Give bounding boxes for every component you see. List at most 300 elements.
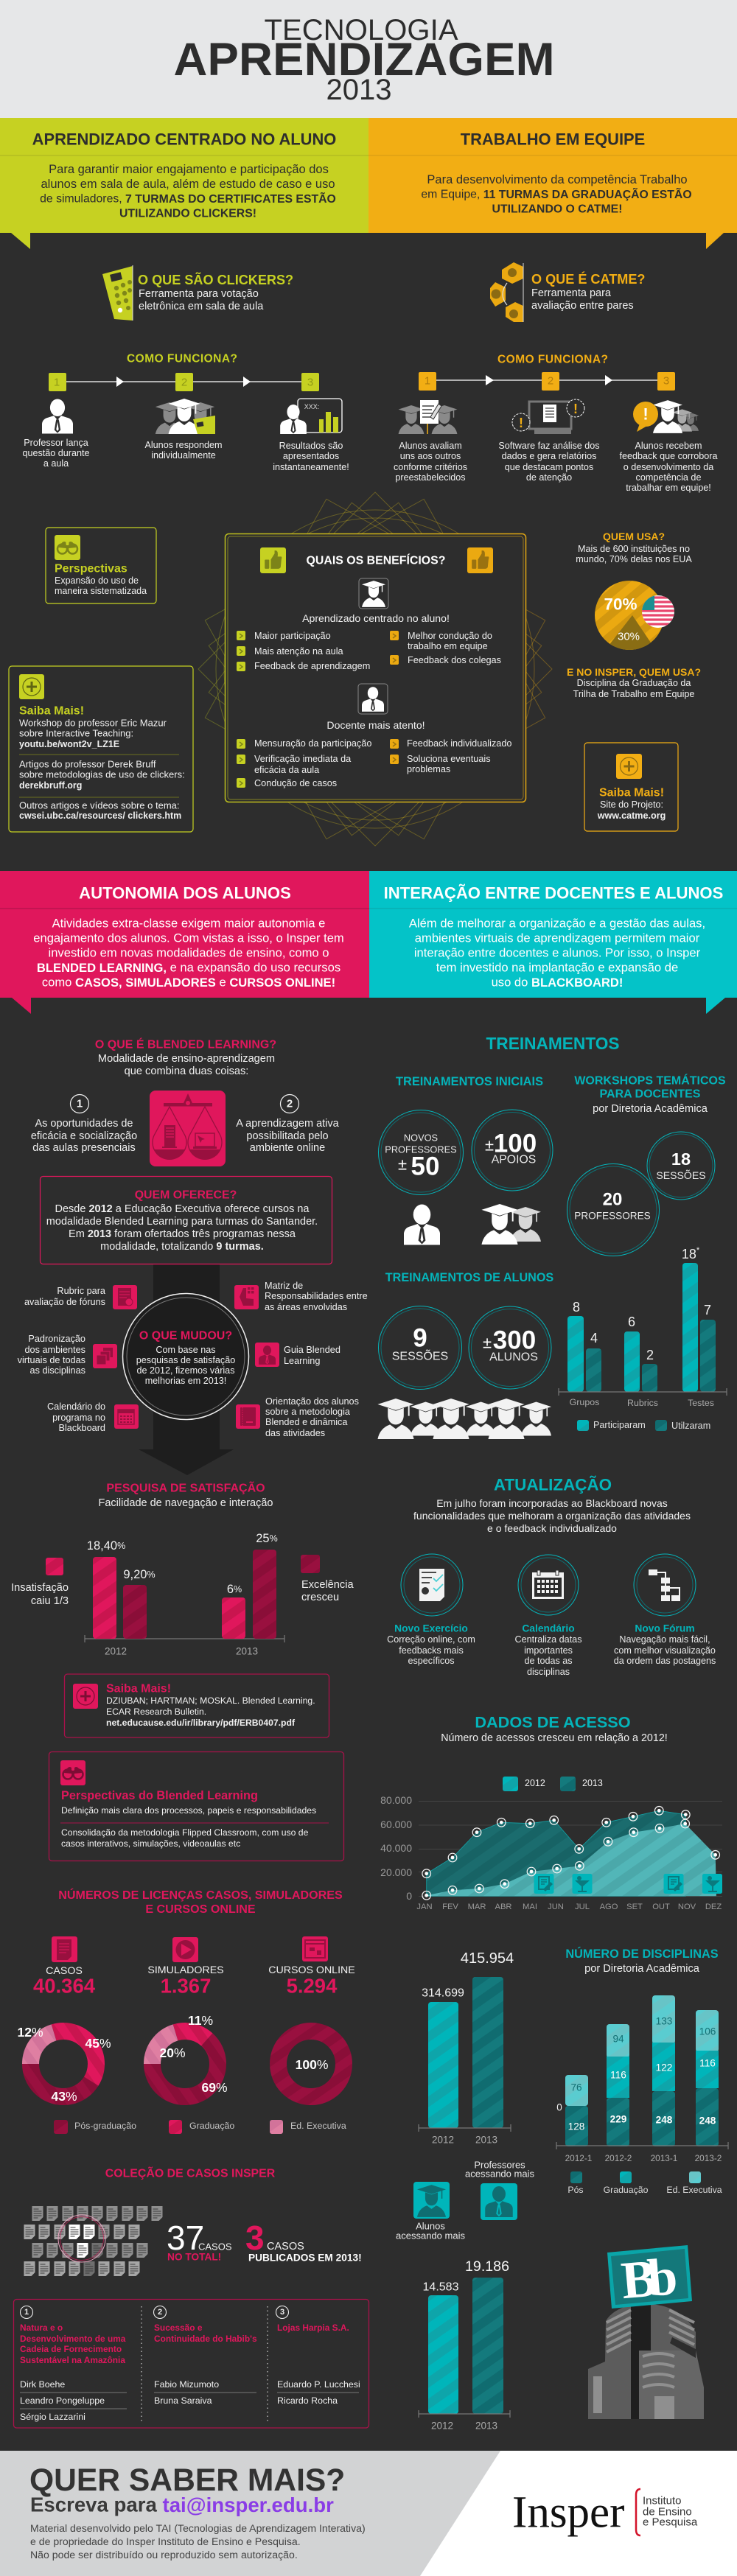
heading: treinamentos iniciais: TREINAMENTOS INICIAIS [396, 1075, 543, 1088]
area chart: acessos: MAI [523, 1903, 537, 1911]
circle: 300 alunos [469, 1306, 551, 1389]
legend [503, 1777, 603, 1791]
stacked bar chart: disciplinas: 116 [699, 2057, 716, 2069]
area chart: acessos: AGO [600, 1903, 618, 1911]
step labels: de atenção [526, 472, 572, 483]
icon: alunos acessando mais: acessando mais [396, 2230, 465, 2241]
step labels: apresentados [283, 451, 339, 461]
stat: 3 casos publicados [245, 2219, 362, 2264]
icon: plus orange [616, 754, 642, 779]
item: aulas presenciais [31, 1095, 137, 1154]
heading: atualizacao: e o feedback individualizado [487, 1522, 617, 1534]
step labels: dados e gera relatórios [502, 451, 596, 461]
text: o que e blended learning [95, 1037, 276, 1077]
step labels: instantaneamente! [273, 462, 349, 472]
icon: plus pink [73, 1684, 98, 1709]
circle: novos professores: NOVOS [404, 1132, 438, 1144]
text: o que é catme [531, 271, 645, 312]
case 1: Desenvolvimento de uma [20, 2334, 126, 2344]
item: padronizacao [18, 1334, 117, 1376]
feature: novo exercicio: Novo Exercício [394, 1623, 468, 1634]
panel: perspectivas clickers [46, 528, 156, 603]
bar chart: treinamentos alunos: 7 [704, 1303, 711, 1317]
feature: calendario: Centraliza datas [514, 1634, 582, 1645]
panel: trabalho em equipe: UTILIZANDO O CATME! [492, 203, 622, 215]
stat: 3 casos publicados: PUBLICADOS EM 2013! [248, 2252, 362, 2264]
stat: simuladores: SIMULADORES [147, 1964, 224, 1976]
circle: o que mudou: pesquisas de satisfação [136, 1355, 235, 1365]
list: teacher benefits: Soluciona eventuais [407, 754, 491, 764]
circle: o que mudou: de 2012, fizemos várias [136, 1365, 235, 1376]
panel: autonomia dos alunos: Atividades extra-classe exigem maior autonomia e [52, 917, 325, 930]
steps connector: clickers [49, 373, 319, 391]
text: o que são clickers: O QUE SÃO CLICKERS? [138, 272, 293, 287]
panel: casos publicados: 2 [158, 2308, 162, 2317]
bar chart: treinamentos alunos: 8 [573, 1300, 580, 1315]
feature: calendario: disciplinas [527, 1667, 570, 1677]
bar chart: satisfacao: 2013 [236, 1646, 258, 1656]
callout: insatisfacao: Insatisfação [11, 1582, 69, 1594]
circle: novos professores: ± [398, 1155, 407, 1173]
icon: alunos avaliam [399, 400, 457, 434]
stacked bar chart: disciplinas: 229 [610, 2113, 627, 2125]
item: aulas presenciais: As oportunidades de [35, 1118, 133, 1130]
item: matriz [234, 1281, 368, 1312]
list: student benefits: Feedback dos colegas [408, 655, 501, 665]
item: matriz: Matriz de [265, 1281, 303, 1291]
circle: 9 sessoes [379, 1306, 461, 1390]
donut chart: casos: 45% [85, 2036, 111, 2051]
donut chart: simuladores: 11% [188, 2013, 213, 2028]
step labels: Alunos respondem [144, 440, 223, 450]
panel: saiba mais clickers: sobre metodologias de uso de clickers: [19, 769, 185, 780]
panel: saiba mais blended: net.educause.edu/ir/library/pdf/ERB0407.pdf [106, 1718, 296, 1728]
panel: perspectivas clickers: Expansão do uso de [55, 575, 139, 586]
panel: aprendizado centrado no aluno: APRENDIZADO CENTRADO NO ALUNO [32, 130, 336, 149]
step labels: Professor lança [24, 438, 88, 448]
heading: pesquisa de satisfacao [99, 1480, 273, 1509]
area chart: acessos: NOV [678, 1903, 696, 1911]
panel: aprendizado centrado no aluno: UTILIZANDO CLICKERS! [119, 208, 256, 220]
donut chart: simuladores: 69% [201, 2080, 228, 2095]
panel: trabalho em equipe: Para desenvolvimento da competência Trabalho [427, 173, 688, 186]
item: guia: Learning [284, 1356, 320, 1366]
icon: software relatorios [512, 399, 584, 434]
step labels: Alunos avaliam [399, 441, 462, 451]
legend: 2012 [525, 1778, 545, 1788]
heading: treinamentos: TREINAMENTOS [486, 1034, 620, 1053]
heading: numeros de licencas: E CURSOS ONLINE [145, 1903, 256, 1916]
icon: alunos recebem feedback: ! [643, 405, 649, 423]
circle: 18 sessoes: SESSÕES [656, 1169, 706, 1181]
bar chart: treinamentos alunos: Testes [688, 1398, 714, 1408]
stacked bar chart: disciplinas: 2012-1 [565, 2153, 592, 2163]
area chart: acessos: 80.000 [380, 1794, 412, 1806]
icon: note [663, 1874, 684, 1894]
step labels: competência de [636, 472, 701, 483]
case 3: Lojas Harpia S.A. [277, 2323, 349, 2333]
steps connector: clickers: 2 [181, 376, 187, 389]
list: student benefits: Melhor condução do [408, 631, 492, 641]
legend: donuts [54, 2120, 346, 2134]
list: student benefits [237, 631, 501, 671]
stacked bar chart: disciplinas: 248 [656, 2115, 673, 2125]
legend: Utilzaram [671, 1421, 710, 1431]
heading: treinamentos de alunos: TREINAMENTOS DE ALUNOS [385, 1271, 553, 1284]
bar chart: acessos professores: 19.186 [465, 2258, 509, 2275]
text: o que são clickers: Ferramenta para votação [139, 288, 259, 300]
icon row: alunos [377, 1399, 551, 1439]
circle: novos professores: PROFESSORES [385, 1144, 457, 1155]
feature: novo forum: Navegação mais fácil, [619, 1634, 710, 1645]
circle: 20 professores: 20 [603, 1189, 622, 1210]
icon: binoculars [55, 535, 80, 560]
circle: 9 sessoes: 9 [413, 1323, 427, 1353]
item: guia: Guia Blended [284, 1345, 340, 1355]
panel: saiba mais blended: DZIUBAN; HARTMAN; MOSKAL. Blended Learning. [106, 1695, 315, 1706]
item: aulas presenciais: eficácia e socialização [31, 1130, 137, 1142]
panel: interacao entre docentes e alunos: tem investido na implantação e expansão de [436, 961, 678, 974]
step labels: Resultados são [279, 441, 343, 451]
case 2: Fabio Mizumoto [154, 2379, 219, 2390]
case 1: Dirk Boehe [20, 2379, 65, 2390]
list: teacher benefits [237, 738, 511, 788]
panel: saiba mais clickers [9, 666, 193, 832]
step labels: feedback que corrobora [619, 451, 718, 461]
text: e no insper quem usa [567, 666, 701, 699]
circle: apoios: 100 [494, 1129, 537, 1158]
text: quem usa: mundo, 70% delas nos EUA [576, 554, 692, 564]
icon: martini [702, 1874, 722, 1894]
logo: insper: e Pesquisa [643, 2516, 698, 2529]
case 1: Natura e o [20, 2323, 63, 2333]
icon: student [359, 578, 388, 609]
circle: apoios: ± [485, 1136, 494, 1154]
circle: apoios: APOIOS [492, 1154, 536, 1166]
case 1 [20, 2323, 127, 2422]
bar chart: acessos alunos: 2013 [475, 2134, 497, 2146]
icon: alunos acessando mais [396, 2182, 465, 2241]
panel: saiba mais clickers: youtu.be/wont2v_LZ1E [19, 739, 119, 749]
pie chart: 70 30: 70% [604, 595, 638, 613]
text: o que são clickers: eletrônica em sala de aula [139, 301, 264, 312]
callout: excelencia: cresceu [301, 1592, 339, 1603]
stacked bar chart: disciplinas: 106 [699, 2026, 716, 2037]
text: quem usa: QUEM USA? [603, 531, 665, 542]
bar chart: acessos alunos: 415.954 [461, 1950, 514, 1967]
item: ambiente online: ambiente online [250, 1142, 325, 1154]
list: teacher benefits: Feedback individualizado [407, 738, 511, 749]
text: o que é catme: avaliação entre pares [531, 300, 634, 312]
step labels [22, 438, 718, 493]
panel: perspectivas clickers: Perspectivas [55, 563, 128, 575]
icon: docente [358, 684, 388, 714]
icon: alunos acessando mais: Alunos [416, 2221, 445, 2231]
logo: insper: Insper [512, 2488, 624, 2538]
icon: plus [19, 674, 44, 699]
donut chart: cursos online [279, 2031, 343, 2097]
step labels: conforme critérios [394, 462, 467, 472]
heading: pesquisa de satisfacao: PESQUISA DE SATISFAÇÃO [106, 1480, 265, 1494]
bar chart: treinamentos alunos: * [696, 1246, 700, 1255]
item: guia [255, 1343, 340, 1367]
bar chart: acessos professores: 2012 [431, 2420, 453, 2432]
step labels: a aula [43, 458, 69, 469]
circle: 18 sessoes [647, 1132, 715, 1200]
stat: 37 casos: CASOS [198, 2241, 232, 2252]
step labels: o desenvolvimento da [624, 462, 713, 472]
step labels: trabalhar em equipe! [626, 483, 711, 493]
text: o que são clickers [138, 272, 293, 312]
item: ambiente online: possibilitada pelo [246, 1130, 329, 1142]
donut chart: casos: 43% [51, 2089, 77, 2104]
heading: numeros de licencas [58, 1888, 343, 1916]
item: orientacao [236, 1396, 359, 1438]
panel: trabalho em equipe: em Equipe, 11 TURMAS DA GRADUAÇÃO ESTÃO [421, 186, 692, 200]
item: calendario: programa no [52, 1413, 105, 1423]
step labels: que destacam pontos [505, 462, 593, 472]
stat: casos: CASOS [46, 1965, 83, 1977]
callout: insatisfacao [11, 1558, 69, 1607]
list: teacher benefits: Verificação imediata da [254, 754, 352, 764]
circle: novos professores: 50 [411, 1152, 439, 1180]
stat: 37 casos: NO TOTAL! [167, 2252, 221, 2262]
bar chart: treinamentos alunos [559, 1246, 727, 1431]
case 3: Eduardo P. Lucchesi [277, 2379, 360, 2390]
stat: 37 casos [167, 2219, 232, 2262]
steps connector: catme: 1 [425, 374, 430, 388]
circle: o que mudou: O QUE MUDOU? [139, 1329, 232, 1343]
panel: casos publicados: 1 [24, 2308, 29, 2317]
illustration: predio [588, 2245, 704, 2419]
item: orientacao: Blended e dinâmica [265, 1417, 348, 1427]
legend: Ed. Executiva [666, 2185, 722, 2195]
text: o que e blended learning: Modalidade de ensino-aprendizagem [98, 1053, 275, 1065]
feature: novo exercicio: Correção online, com [387, 1634, 475, 1645]
step labels: individualmente [151, 450, 216, 461]
text: aprendizado centrado: Aprendizado centrado no aluno! [302, 612, 450, 624]
stat: cursos online [268, 1936, 355, 1997]
stacked bar chart: disciplinas: 2012-2 [605, 2153, 632, 2163]
icon: alunos respondem [156, 399, 215, 434]
text: escreva para: Escreva para tai@insper.edu.br [30, 2493, 334, 2516]
panel: quem oferece: Desde 2012 a Educação Executiva oferece cursos na [55, 1203, 310, 1215]
bar chart: acessos alunos: 314.699 [422, 1987, 464, 2000]
panel: interacao entre docentes e alunos: uso do BLACKBOARD! [492, 976, 623, 989]
panel: saiba mais catme: Saiba Mais! [599, 787, 664, 799]
pie chart: 70 30 [595, 581, 675, 656]
item: rubric [24, 1285, 137, 1309]
case 2: Sucessão e [154, 2323, 203, 2333]
icon: alunos recebem feedback [633, 400, 699, 433]
heading: numero de disciplinas: NÚMERO DE DISCIPLINAS [565, 1947, 719, 1961]
text: creditos: Não pode ser distribuído ou reproduzido sem autorização. [30, 2549, 298, 2561]
case 2 [154, 2323, 257, 2406]
legend: donuts: Ed. Executiva [290, 2121, 346, 2131]
bar chart: acessos alunos: 2012 [432, 2134, 454, 2146]
icon: clicker [102, 265, 133, 321]
stat: simuladores [147, 1937, 224, 1997]
step labels: Alunos recebem [635, 441, 702, 451]
heading: QUAIS OS BENEFÍCIOS? [307, 553, 445, 567]
panel: aprendizado centrado no aluno [0, 118, 368, 249]
area chart: acessos: 0 [406, 1890, 412, 1902]
panel: perspectivas do blended learning: Consolidação da metodologia Flipped Classroom, com uso de [61, 1827, 309, 1838]
icon: thumb up green [260, 547, 286, 573]
panel: interacao entre docentes e alunos: INTERAÇÃO ENTRE DOCENTES E ALUNOS [384, 884, 723, 902]
stacked bar chart: disciplinas [556, 1995, 728, 2195]
icon: professor [42, 399, 73, 434]
icon: resultados [280, 399, 342, 434]
item: matriz: as áreas envolvidas [265, 1302, 347, 1312]
panel: aprendizado centrado no aluno: de simuladores, 7 TURMAS DO CERTIFICATES ESTÃO [40, 190, 336, 205]
area chart: acessos: 40.000 [380, 1842, 412, 1854]
text: creditos: Material desenvolvido pelo TAI (Tecnologias de Aprendizagem Interativa) [30, 2522, 366, 2534]
list: student benefits: Feedback de aprendizagem [254, 661, 370, 671]
panel: casos publicados [13, 2299, 368, 2428]
panel: saiba mais catme: Site do Projeto: [600, 799, 663, 810]
bar chart: satisfacao [85, 1532, 284, 1656]
area chart: acessos: OUT [652, 1903, 670, 1911]
circle: 18 sessoes: 18 [671, 1149, 691, 1169]
callout: excelencia: Excelência [301, 1579, 354, 1591]
panel: perspectivas clickers: maneira sistematizada [55, 586, 147, 596]
panel: autonomia dos alunos: como CASOS, SIMULADORES e CURSOS ONLINE! [42, 976, 335, 989]
legend: Participaram [593, 1420, 646, 1430]
steps connector: catme [419, 372, 675, 391]
panel: perspectivas do blended learning: casos interativos, simulações, videoaulas etc [61, 1838, 240, 1849]
panel: autonomia dos alunos: investido em novas modalidades de ensino, como o [49, 946, 329, 959]
item: padronizacao: as disciplinas [30, 1365, 85, 1376]
panel: interacao entre docentes e alunos: interação entre docentes e alunos. Por isso, o Insper [414, 946, 701, 959]
heading: como funciona clickers: COMO FUNCIONA? [127, 352, 237, 365]
stat: simuladores: 1.367 [161, 1975, 211, 1997]
item: ambiente online: 2 [287, 1098, 293, 1110]
heading: dados de acesso: Número de acessos cresceu em relação a 2012! [441, 1732, 668, 1744]
panel: saiba mais clickers: sobre Interactive Teaching: [19, 728, 133, 738]
bar chart: satisfacao: 25% [256, 1532, 278, 1545]
list: student benefits: Maior participação [254, 631, 331, 641]
logo: insper: de Ensino [643, 2505, 692, 2519]
bar chart: acessos professores: 2013 [475, 2420, 497, 2432]
area chart: acessos: SET [626, 1903, 643, 1911]
stacked bar chart: disciplinas: 94 [612, 2034, 624, 2044]
area chart: acessos [380, 1777, 722, 1911]
legend: Graduação [604, 2185, 649, 2195]
area chart: acessos: JUL [575, 1903, 590, 1911]
bar chart: treinamentos alunos: 6 [628, 1315, 635, 1329]
item: calendario [47, 1401, 139, 1433]
legend: Pós [567, 2185, 584, 2195]
heading: atualizacao: ATUALIZAÇÃO [494, 1475, 612, 1494]
panel: saiba mais clickers: cwsei.ubc.ca/resources/ clickers.htm [19, 811, 181, 821]
heading: workshops tematicos: por Diretoria Acadêmica [593, 1103, 708, 1115]
bar chart: satisfacao: 2012 [105, 1646, 127, 1656]
stat: casos: 40.364 [33, 1975, 96, 1997]
donut chart: simuladores [152, 2013, 228, 2097]
text: e no insper quem usa: Disciplina da Graduação da [577, 678, 691, 688]
bar chart: treinamentos alunos: 4 [590, 1331, 598, 1345]
area chart: acessos: FEV [442, 1903, 458, 1911]
decorative star [156, 450, 594, 888]
panel: saiba mais catme [584, 743, 678, 831]
logo: insper: Instituto [643, 2495, 682, 2507]
title: TECNOLOGIA [264, 14, 458, 46]
stat: 3 casos publicados: 3 [245, 2219, 265, 2257]
panel: perspectivas do blended learning: Perspectivas do Blended Learning [61, 1789, 258, 1802]
area chart: acessos: 60.000 [380, 1819, 412, 1830]
steps connector: catme: 2 [548, 374, 553, 388]
feature: novo forum: Novo Fórum [635, 1623, 695, 1634]
bar chart: acessos professores [419, 2258, 510, 2432]
text: e no insper quem usa: E NO INSPER, QUEM USA? [567, 666, 701, 678]
pie chart: 70 30: 30% [618, 631, 640, 643]
text: creditos: e de propriedade do Insper Instituto de Ensino e Pesquisa. [30, 2535, 301, 2547]
big arrow [139, 1264, 234, 1475]
panel: saiba mais blended [65, 1674, 329, 1737]
panel: saiba mais clickers: Workshop do professor Eric Mazur [19, 718, 167, 728]
bar chart: acessos alunos [419, 1950, 514, 2146]
panel: interacao entre docentes e alunos: ambientes virtuais de aprendizagem permitem maior [415, 931, 700, 945]
heading: colecao de casos: COLEÇÃO DE CASOS INSPER [105, 2165, 276, 2180]
panel: autonomia dos alunos: engajamento dos alunos. Com vistas a isso, o Insper tem [33, 931, 344, 945]
steps connector: clickers: 3 [307, 376, 313, 389]
item: calendario: Calendário do [47, 1401, 105, 1412]
panel: autonomia dos alunos: AUTONOMIA DOS ALUNOS [79, 884, 291, 902]
panel: quem oferece: modalidade Blended Learning para turmas do Santander. [46, 1216, 318, 1228]
panel: trabalho em equipe: TRABALHO EM EQUIPE [461, 130, 645, 149]
stat: 37 casos: 37 [167, 2219, 204, 2257]
icon: software relatorios: ! [573, 402, 578, 416]
title [0, 0, 737, 118]
legend [567, 2171, 722, 2195]
bar chart: treinamentos alunos: 18 [682, 1247, 696, 1261]
panel: casos publicados: 3 [280, 2308, 284, 2317]
panel: autonomia dos alunos: BLENDED LEARNING, e na expansão do uso recursos [37, 961, 340, 974]
donut chart: simuladores: 20% [159, 2045, 186, 2060]
case 1: Sérgio Lazzarini [20, 2412, 85, 2422]
item: padronizacao: Padronização [28, 1334, 85, 1344]
text: quem usa [576, 531, 692, 564]
case 1: Sustentável na Amazônia [20, 2355, 125, 2365]
case 3 [277, 2323, 360, 2406]
callout: insatisfacao: caiu 1/3 [31, 1595, 69, 1607]
item: aulas presenciais: das aulas presenciais [32, 1142, 136, 1154]
icon: resultados: XXX: [304, 403, 319, 410]
text: docente mais atento: Docente mais atento! [326, 719, 425, 731]
feature: calendario [514, 1555, 582, 1677]
list: teacher benefits: eficácia da aula [254, 765, 320, 775]
steps connector: clickers: 1 [54, 376, 60, 389]
circle: 300 alunos: 300 [493, 1326, 536, 1354]
case 2: Bruna Saraiva [154, 2395, 212, 2406]
heading: dados de acesso: DADOS DE ACESSO [475, 1712, 631, 1732]
circle: o que mudou: melhorias em 2013! [145, 1376, 226, 1386]
steps connector: catme: 3 [663, 374, 669, 388]
footer [0, 2451, 737, 2576]
heading: atualizacao: funcionalidades que melhoram a organização das atividades [413, 1510, 691, 1522]
list: student benefits: Mais atenção na aula [254, 646, 344, 657]
bar chart: acessos professores: 14.583 [423, 2281, 459, 2293]
text: e no insper quem usa: Trilha de Trabalho em Equipe [573, 689, 694, 699]
panel: quais os beneficios [226, 533, 526, 802]
panel: saiba mais clickers: derekbruff.org [19, 780, 82, 791]
stacked bar chart: disciplinas: 128 [568, 2121, 584, 2132]
text: creditos [30, 2522, 366, 2561]
item: orientacao: sobre a metodologia [265, 1407, 351, 1417]
icon: professores acessando mais: Professores [474, 2159, 525, 2171]
text: o que e blended learning: O QUE É BLENDED LEARNING? [95, 1037, 276, 1051]
